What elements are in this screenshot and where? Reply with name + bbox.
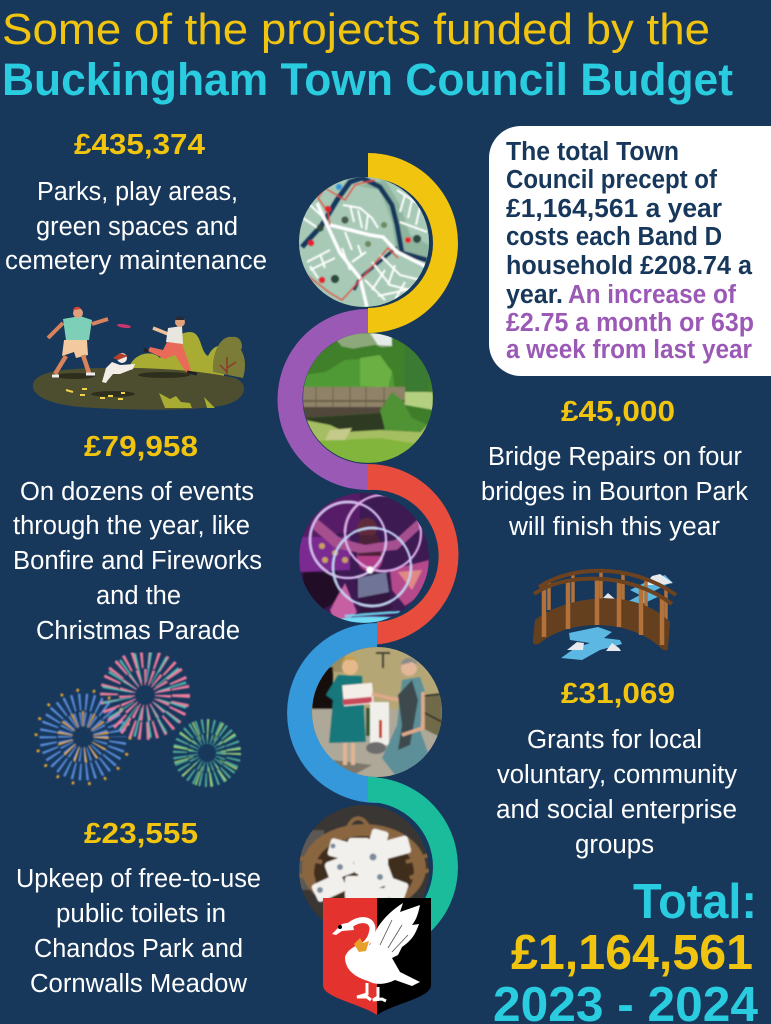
- front posts: [544, 577, 662, 645]
- total: [493, 875, 758, 1024]
- panel: precept callout: The total Town: [506, 138, 679, 166]
- grass: [159, 393, 192, 408]
- runner: [153, 328, 168, 334]
- right block: bridges: [481, 396, 748, 541]
- illustration: frisbee in park: [33, 307, 245, 410]
- left block: toilets: Upkeep of free-to-use: [16, 865, 261, 893]
- title: [2, 5, 733, 105]
- left block: parks: [5, 129, 267, 275]
- man with frisbee: [48, 319, 108, 338]
- left block: parks: green spaces and: [36, 213, 238, 241]
- left block: parks: £435,374: [74, 129, 205, 161]
- right block: grants: and social enterprise: [496, 796, 737, 824]
- panel: precept callout: £1,164,561 a year: [506, 195, 722, 223]
- panel: precept callout: costs each Band D: [506, 223, 722, 251]
- total: £1,164,561: [511, 926, 753, 980]
- panel: precept callout: a week from last year: [506, 336, 752, 364]
- panel: precept callout: household £208.74 a: [506, 252, 753, 280]
- deck: [533, 598, 670, 650]
- left block: parks: cemetery maintenance: [5, 247, 267, 275]
- panel: precept callout: Council precept of: [506, 166, 717, 194]
- arc: yellow: [368, 153, 458, 333]
- photo: basket of toilet rolls: [299, 805, 429, 920]
- central timeline arcs: [278, 153, 458, 957]
- illustration: wooden bridge: [533, 570, 676, 660]
- right block: grants: [496, 678, 737, 859]
- left block: toilets: Chandos Park and: [34, 935, 243, 963]
- left block: events: On dozens of events: [20, 478, 254, 506]
- arc: blue: [287, 623, 377, 803]
- left block: events: and the: [96, 582, 181, 610]
- right block: bridges: £45,000: [561, 396, 675, 428]
- photo: wooden bridge: [303, 333, 433, 463]
- right block: bridges: will finish this year: [508, 513, 721, 541]
- town crest shield: [323, 898, 431, 1015]
- illustration: fireworks: [36, 659, 234, 784]
- arc: purple: [278, 309, 368, 490]
- left block: events: [13, 431, 262, 645]
- left block: toilets: public toilets in: [56, 900, 226, 928]
- water: [561, 627, 622, 660]
- ground: [33, 368, 244, 410]
- left block: toilets: [16, 818, 261, 998]
- right block: bridges: Bridge Repairs on four: [488, 443, 743, 471]
- panel: precept callout: [489, 126, 771, 376]
- back rail posts: [549, 570, 666, 620]
- frisbee: [117, 323, 131, 329]
- left block: events: £79,958: [84, 431, 198, 463]
- arc: green: [368, 777, 458, 957]
- swan: [332, 903, 420, 1001]
- panel: precept callout: year.: [506, 281, 563, 309]
- title: Some of the projects funded by the: [2, 5, 710, 54]
- right block: grants: voluntary, community: [497, 761, 737, 789]
- photo: grant cheque presentation: [312, 647, 442, 777]
- left block: events: Christmas Parade: [36, 617, 240, 645]
- bushes: [128, 332, 224, 376]
- right block: grants: Grants for local: [527, 726, 702, 754]
- photo: park map: [299, 177, 429, 307]
- right block: bridges: bridges in Bourton Park: [481, 478, 748, 506]
- left block: toilets: £23,555: [84, 818, 198, 850]
- right block: grants: £31,069: [561, 678, 675, 710]
- title: Buckingham Town Council Budget: [2, 54, 733, 105]
- left block: events: Bonfire and Fireworks: [13, 547, 262, 575]
- panel: precept callout: An increase of: [568, 281, 736, 309]
- left block: toilets: Cornwalls Meadow: [30, 970, 248, 998]
- left block: events: through the year, like: [13, 512, 250, 540]
- photo: LED hoop performer: [299, 493, 429, 624]
- right block: grants: groups: [575, 831, 654, 859]
- arc: red: [368, 464, 458, 645]
- dog: [102, 362, 135, 383]
- shadows and leaves: [55, 373, 95, 379]
- total: Total:: [633, 875, 757, 929]
- panel: precept callout: £2.75 a month or 63p: [506, 309, 754, 337]
- left block: parks: Parks, play areas,: [37, 178, 238, 206]
